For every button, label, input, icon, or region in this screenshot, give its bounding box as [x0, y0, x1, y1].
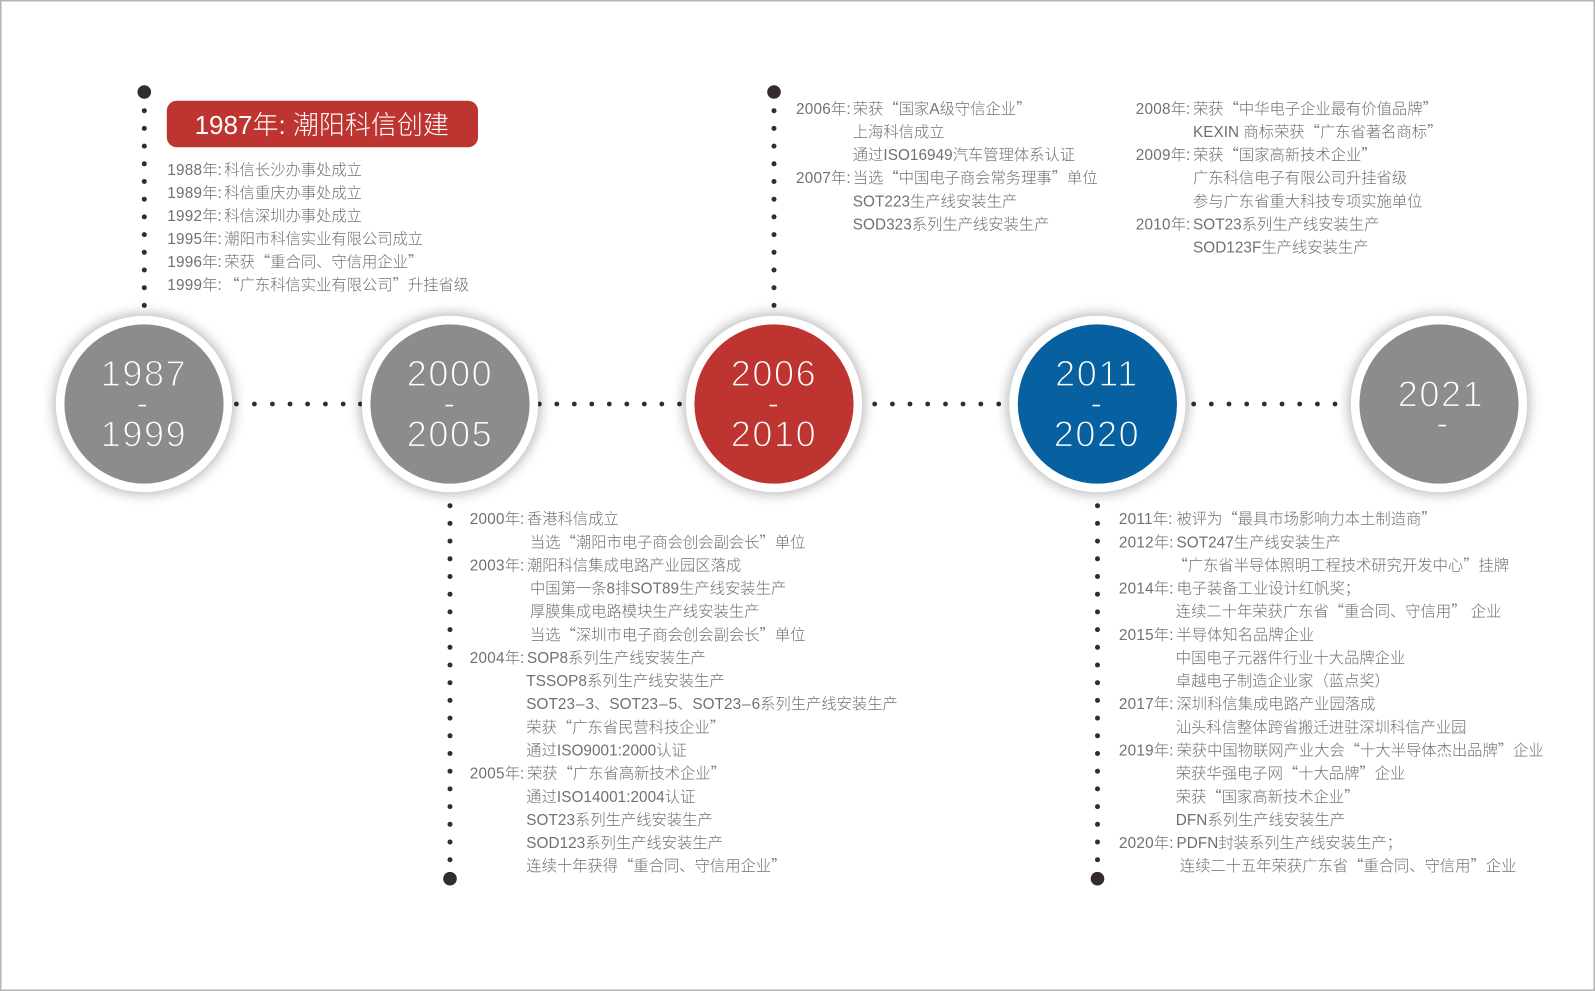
text block: 2008-2010 events: “国家高新技术企业” — [1224, 143, 1377, 165]
text block: 1988-1999 events: 年: — [202, 162, 222, 179]
text block: 2008-2010 events: “中华电子企业最有价值品牌” — [1224, 97, 1438, 119]
text block: 2008-2010 events: 2009 — [1136, 147, 1171, 164]
text block: 2000-2005 events: 当选 — [530, 534, 561, 551]
text block: 2011-2020 events: 电子装备工业设计红帆奖； — [1176, 581, 1360, 598]
text block: 2008-2010 events: SOD123F — [1193, 240, 1261, 256]
text block: 2000-2005 events: TSSOP8 — [526, 673, 587, 690]
text block: 2011-2020 events: 年: — [1154, 742, 1173, 760]
text block: 1988-1999 events: 1996 — [167, 254, 202, 271]
text block: 2000-2005 events: SOD123 — [526, 835, 585, 852]
text block: 2011-2020 events: 2014 — [1119, 581, 1154, 598]
text block: 2011-2020 events: 连续二十五年荣获广东省 — [1180, 858, 1348, 875]
milestone circle: 2006-2010: 2010 — [731, 414, 817, 454]
text block: 2006-2007 events: 上海科信成立 — [853, 124, 945, 141]
milestone circle: 2000-2005: - — [443, 382, 457, 423]
text block: 2000-2005 events: 2000 — [470, 511, 505, 528]
text block: 2000-2005 events: 荣获 — [527, 766, 558, 783]
text block: 2006-2007 events: “中国电子商会常务理事”单位 — [883, 166, 1098, 188]
text block: 2006-2007 events: 年: — [831, 101, 851, 118]
text block: 2011-2020 events: 中国电子元器件行业十大品牌企业 — [1176, 650, 1405, 667]
dotted line: bottom of 2011 era — [1091, 503, 1104, 886]
milestone circle: 2006-2010 — [684, 314, 864, 494]
text block: 2011-2020 events: 2019 — [1119, 742, 1154, 760]
text block: 2000-2005 events: 系列生产线安装生产 — [585, 835, 723, 852]
text block: 2011-2020 events: “重合同、守信用”企业 — [1348, 854, 1516, 876]
text block: 1988-1999 events: 年: — [202, 277, 222, 294]
text block: 2011-2020 events: 生产线安装生产 — [1234, 534, 1341, 551]
text block: 2000-2005 events: –3、SOT23–5、SOT23–6系列生产线安装生产 — [576, 696, 898, 713]
text block: 2011-2020 events: 荣获华强电子网 — [1176, 766, 1283, 783]
text block: 2011-2020 events: 年: — [1154, 627, 1173, 644]
text block: 1988-1999 events: 1989 — [167, 185, 202, 202]
text block: 2011-2020 events: 2015 — [1119, 627, 1154, 644]
milestone circle: 2021-: 2021 — [1398, 374, 1484, 414]
text block: 2000-2005 events: “广东省民营科技企业” — [557, 715, 725, 737]
text block: 2011-2020 events: 封装系列生产线安装生产； — [1218, 835, 1402, 852]
text block: 2000-2005 events: 潮阳科信集成电路产业园区落成 — [527, 558, 741, 574]
text block: 1988-1999 events — [167, 162, 469, 295]
text block: 2011-2020 events: “十大半导体杰出品牌”企业 — [1345, 738, 1544, 760]
text block: 2006-2007 events — [796, 97, 1098, 233]
text block: 2011-2020 events: 2012 — [1119, 534, 1154, 551]
milestone circle: 2006-2010: 2006 — [731, 353, 817, 394]
text block: 2008-2010 events — [1136, 97, 1442, 256]
text block: 2011-2020 events: 被评为 — [1176, 511, 1222, 528]
text block: 2006-2007 events: “国家A级守信企业” — [883, 97, 1031, 119]
text block: 2000-2005 events: 中国第一条 — [530, 581, 606, 598]
text block: 2006-2007 events: 系列生产线安装生产 — [912, 216, 1049, 233]
text block: 2011-2020 events: 年: — [1154, 835, 1173, 852]
text block: 2000-2005 events: ISO9001:2000认证 — [557, 742, 687, 760]
milestone circle: 2021-: - — [1436, 402, 1450, 443]
text block: 2011-2020 events: SOT247 — [1176, 534, 1234, 551]
text block: 1988-1999 events: “ — [224, 273, 240, 295]
text block: 2000-2005 events: 系列生产线安装生产 — [575, 812, 713, 829]
text block: 2008-2010 events: 广东科信电子有限公司升挂省级 — [1193, 170, 1407, 187]
milestone circle: 2006-2010: - — [767, 382, 781, 423]
text block: 2000-2005 events: “重合同、守信用企业” — [618, 854, 786, 876]
text block: 2011-2020 events: 2017 — [1119, 696, 1154, 713]
text block: 2011-2020 events: “ — [1172, 554, 1188, 576]
text block: 1988-1999 events: 荣获 — [224, 254, 255, 271]
text block: 2008-2010 events: 生产线安装生产 — [1261, 240, 1368, 256]
heading: 1987 founding banner: 潮阳科信创建 — [293, 110, 449, 140]
text block: 2008-2010 events: 年: — [1171, 101, 1190, 118]
heading: 1987 founding banner: 年: — [252, 110, 286, 140]
text block: 2008-2010 events: 系列生产线安装生产 — [1242, 216, 1379, 233]
text block: 2000-2005 events: 厚膜集成电路模块生产线安装生产 — [530, 604, 759, 621]
text block: 2000-2005 events: SOT23 — [526, 696, 575, 713]
text block: 2008-2010 events: 荣获 — [1193, 101, 1224, 118]
text block: 1988-1999 events: 1992 — [167, 208, 202, 225]
text block: 2000-2005 events: “广东省高新技术企业” — [558, 762, 726, 784]
milestone circle: 2000-2005: 2000 — [407, 353, 493, 394]
text block: 2000-2005 events: 年: — [505, 650, 524, 667]
text block: 2011-2020 events: “最具市场影响力本土制造商” — [1222, 507, 1437, 529]
text block: 2008-2010 events: 2008 — [1136, 101, 1171, 118]
text block: 2000-2005 events: ISO14001:2004认证 — [557, 789, 695, 806]
text block: 2011-2020 events: 半导体知名品牌企业 — [1176, 627, 1314, 644]
milestone circle: 1987-1999: 1999 — [101, 414, 187, 454]
text block: 2000-2005 events: SOT23 — [526, 812, 575, 829]
text block: 1988-1999 events: 年: — [202, 254, 222, 271]
text block: 1988-1999 events: 科信重庆办事处成立 — [224, 185, 362, 202]
text block: 2006-2007 events: SOT223 — [853, 193, 910, 210]
text block: 2011-2020 events: 汕头科信整体跨省搬迁进驻深圳科信产业园 — [1176, 719, 1466, 736]
dotted line: bottom of 2000 era — [443, 503, 457, 886]
milestone circle: 2000-2005 — [360, 314, 540, 494]
text block: 2011-2020 events: 卓越电子制造企业家（蓝点奖） — [1176, 673, 1390, 690]
text block: 2000-2005 events: 年: — [505, 558, 524, 574]
text block: 1988-1999 events: 科信长沙办事处成立 — [224, 162, 362, 179]
text block: 2008-2010 events: KEXIN — [1193, 124, 1243, 141]
text block: 2000-2005 events: 荣获 — [526, 719, 557, 736]
text block: 2000-2005 events: 连续十年获得 — [526, 858, 618, 875]
text block: 1988-1999 events: 年: — [202, 208, 222, 225]
text block: 2011-2020 events: “十大品牌”企业 — [1283, 762, 1405, 784]
text block: 2008-2010 events: 年: — [1171, 216, 1190, 233]
milestone circle: 2011-2020: 2020 — [1054, 414, 1140, 454]
text block: 2000-2005 events: 2004 — [470, 650, 505, 667]
heading: 1987 founding banner: 1987 — [195, 110, 252, 140]
milestone circle: 1987-1999 — [54, 314, 234, 494]
text block: 2000-2005 events: 2005 — [470, 766, 505, 783]
dotted horizontal connector between milestones — [234, 402, 1337, 406]
text block: 1988-1999 events: 1995 — [167, 231, 202, 248]
milestone circle: 2011-2020 — [1007, 314, 1187, 494]
text block: 2000-2005 events: SOP8 — [527, 650, 568, 667]
text block: 2000-2005 events: 系列生产线安装生产 — [587, 673, 725, 690]
text block: 2008-2010 events: SOT23 — [1193, 216, 1242, 233]
text block: 2011-2020 events: 荣获 — [1176, 789, 1206, 806]
text block: 2011-2020 events: 连续二十年荣获广东省 — [1176, 604, 1329, 621]
text block: 2011-2020 events: 广东省半导体照明工程技术研究开发中心”挂牌 — [1188, 554, 1509, 576]
text block: 2000-2005 events: 当选 — [530, 627, 561, 644]
text block: 2000-2005 events: 通过 — [526, 742, 557, 760]
text block: 2011-2020 events: 年: — [1154, 696, 1173, 713]
text block: 2000-2005 events: 系列生产线安装生产 — [568, 650, 706, 667]
dotted line: top of 1987 era — [138, 85, 151, 308]
text block: 2011-2020 events: 年: — [1153, 511, 1172, 528]
text block: 1988-1999 events: 1999 — [167, 277, 202, 294]
text block: 2000-2005 events: 年: — [505, 766, 524, 783]
text block: 1988-1999 events: 广东科信实业有限公司”升挂省级 — [240, 273, 469, 295]
milestone circle: 2011-2020: 2011 — [1055, 353, 1139, 394]
text block: 2011-2020 events: 深圳科信集成电路产业园落成 — [1176, 696, 1375, 713]
text block: 1988-1999 events: 潮阳市科信实业有限公司成立 — [224, 231, 423, 248]
text block: 1988-1999 events: 科信深圳办事处成立 — [224, 208, 362, 225]
text block: 2000-2005 events: “深圳市电子商会创会副会长”单位 — [561, 623, 805, 645]
milestone circle: 1987-1999: 1987 — [101, 353, 187, 394]
text block: 2008-2010 events: 商标荣获“广东省著名商标” — [1243, 120, 1442, 142]
text block: 2006-2007 events: 生产线安装生产 — [910, 193, 1017, 210]
text block: 2000-2005 events: 通过 — [526, 789, 557, 806]
text block: 2006-2007 events: 2006 — [796, 101, 831, 118]
text block: 2011-2020 events: 2011 — [1119, 511, 1153, 528]
text block: 2008-2010 events: 参与广东省重大科技专项实施单位 — [1193, 193, 1422, 210]
text block: 2011-2020 events: 年: — [1154, 534, 1173, 551]
text block: 2011-2020 events: 2020 — [1119, 835, 1154, 852]
text block: 2000-2005 events: “潮阳市电子商会创会副会长”单位 — [561, 530, 805, 552]
text block: 2006-2007 events: 当选 — [853, 170, 883, 187]
text block: 2006-2007 events: 年: — [831, 170, 851, 187]
text block: 2011-2020 events — [1119, 507, 1544, 876]
heading: 1987 founding banner — [167, 101, 478, 147]
text block: 2006-2007 events: 2007 — [796, 170, 831, 187]
text block: 2000-2005 events: 香港科信成立 — [527, 511, 619, 528]
text block: 1988-1999 events: “重合同、守信用企业” — [255, 250, 423, 272]
dotted line: top of 2006 era — [767, 85, 781, 308]
text block: 1988-1999 events: 年: — [202, 185, 222, 202]
milestone circle: 2000-2005: 2005 — [407, 414, 493, 454]
text block: 2011-2020 events: “重合同、守信用” 企业 — [1329, 600, 1501, 622]
text block: 2006-2007 events: SOD323 — [853, 216, 912, 233]
text block: 2008-2010 events: 荣获 — [1193, 147, 1224, 164]
text block: 2000-2005 events: 8排SOT89生产线安装生产 — [606, 581, 786, 598]
text block: 2006-2007 events: 通过 — [853, 147, 883, 164]
milestone circle: 1987-1999: - — [136, 382, 150, 423]
text block: 2011-2020 events: “国家高新技术企业” — [1206, 785, 1359, 807]
text block: 2006-2007 events: ISO16949汽车管理体系认证 — [883, 147, 1075, 164]
text block: 1988-1999 events: 年: — [202, 231, 222, 248]
text block: 2008-2010 events: 年: — [1171, 147, 1190, 164]
text block: 2000-2005 events: 年: — [505, 511, 524, 528]
milestone circle: 2021- — [1349, 314, 1529, 494]
text block: 2000-2005 events: 2003 — [470, 558, 505, 574]
text block: 2011-2020 events: 系列生产线安装生产 — [1207, 812, 1345, 829]
text block: 2011-2020 events: 荣获中国物联网产业大会 — [1176, 742, 1345, 760]
text block: 2011-2020 events: DFN — [1176, 812, 1207, 829]
text block: 2000-2005 events — [470, 511, 898, 876]
text block: 2008-2010 events: 2010 — [1136, 216, 1171, 233]
text block: 2006-2007 events: 荣获 — [853, 101, 883, 118]
text block: 2011-2020 events: 年: — [1154, 581, 1173, 598]
text block: 1988-1999 events: 1988 — [167, 162, 202, 179]
milestone circle: 2011-2020: - — [1090, 382, 1104, 423]
text block: 2011-2020 events: PDFN — [1176, 835, 1218, 852]
